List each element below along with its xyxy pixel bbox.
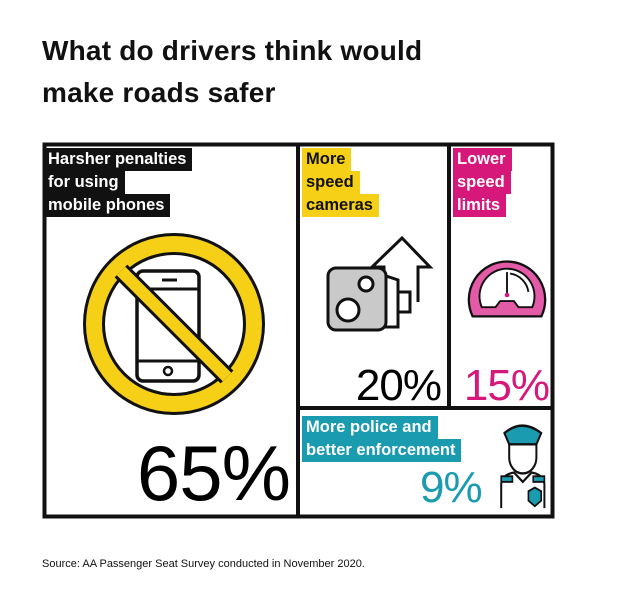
title: make roads safer (42, 77, 276, 108)
label: more police: better enforcement (306, 441, 455, 459)
icon: no phone (83, 233, 265, 415)
label: more speed cameras: cameras (306, 196, 373, 214)
percent: 20%: 20% (356, 361, 441, 410)
label: lower speed limits: limits (457, 196, 500, 214)
label: harsher penalties: for using (48, 173, 119, 191)
title (42, 35, 422, 108)
panel: phones (46, 148, 290, 517)
icon: police officer (500, 424, 546, 508)
label: harsher penalties (46, 148, 192, 217)
label: lower speed limits: Lower (457, 150, 506, 168)
label: harsher penalties: mobile phones (48, 196, 164, 214)
label: lower speed limits (453, 148, 512, 217)
label: more speed cameras: speed (306, 173, 354, 191)
panel: speed cameras (302, 148, 441, 410)
percent: 15%: 15% (464, 361, 549, 410)
label: harsher penalties: Harsher penalties (48, 150, 186, 168)
percent: 9%: 9% (420, 463, 482, 512)
label: more speed cameras (302, 148, 379, 217)
panel: police (302, 416, 546, 512)
label: more police: More police and (306, 418, 432, 436)
panel: speed limits (453, 148, 549, 410)
label: more speed cameras: More (306, 150, 345, 168)
label: lower speed limits: speed (457, 173, 505, 191)
icon: speed camera (326, 236, 434, 332)
icon: speedometer (468, 260, 546, 318)
label: more police (302, 416, 461, 462)
percent: 65%: 65% (137, 429, 290, 517)
title: What do drivers think would (42, 35, 422, 66)
source: Source: AA Passenger Seat Survey conducted in November 2020. (42, 558, 365, 570)
